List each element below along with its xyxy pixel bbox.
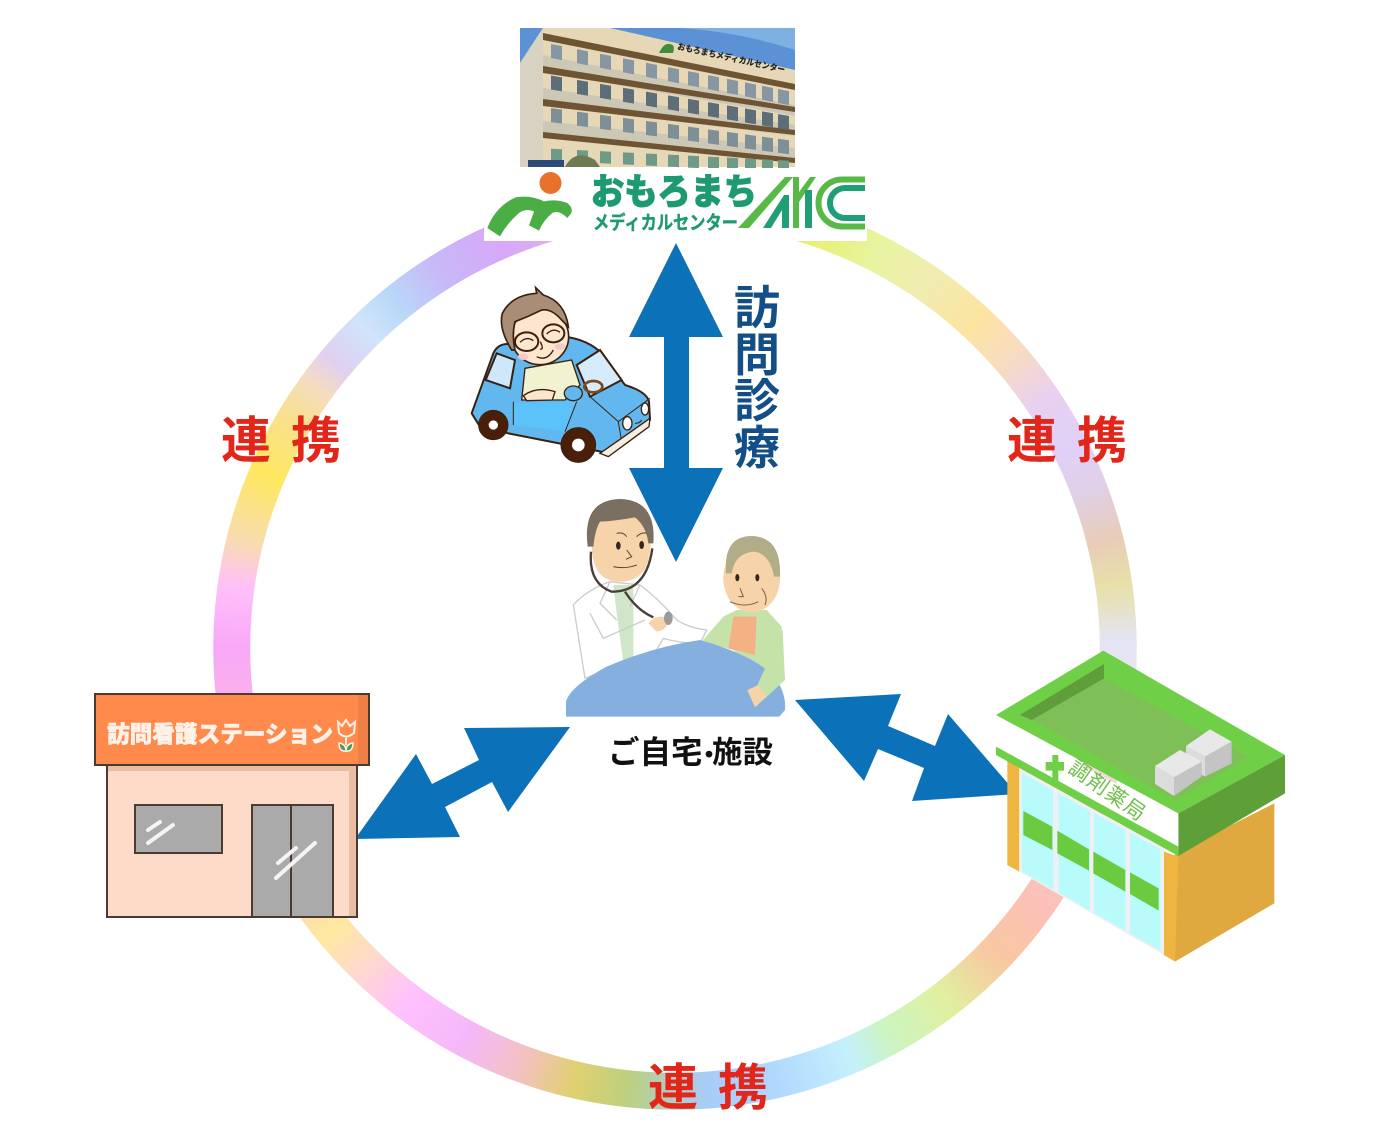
label: cooperation bottom: 連携 — [648, 1060, 788, 1116]
illustration: doctor driving a car — [472, 288, 650, 462]
illustration: doctor examining patient — [566, 499, 785, 717]
label: cooperation left: 連携 — [221, 413, 361, 469]
pharmacy glass front — [1019, 768, 1164, 955]
station door — [252, 805, 333, 917]
label: home or facility: 施設 — [712, 736, 773, 770]
pharmacy roof — [996, 651, 1285, 856]
car wheels — [479, 410, 508, 440]
building: dispensing pharmacy — [996, 651, 1285, 962]
pharmacy walls — [1175, 803, 1274, 962]
vertical label: home-visit care: 訪 — [734, 282, 780, 334]
vertical label: home-visit care: 療 — [734, 422, 780, 474]
label: cooperation right: 連携 — [1007, 413, 1147, 469]
station sign: 訪問看護ステーション — [107, 721, 333, 747]
vertical label: home-visit care: 問 — [734, 329, 780, 381]
vertical label: home-visit care — [734, 282, 780, 474]
logo wordmark: おもろまち — [591, 171, 757, 212]
label: home or facility: ・ — [697, 742, 721, 769]
arrow: nursing station to home — [355, 727, 570, 839]
label: home or facility — [608, 734, 773, 770]
icon: pharmacy cross — [1046, 755, 1064, 783]
steering wheel — [584, 381, 602, 392]
driver — [522, 360, 580, 400]
rainbow cooperation ring — [213, 186, 1137, 1110]
car eyes — [623, 417, 632, 430]
arrow: home to pharmacy — [795, 694, 1017, 801]
patient — [702, 536, 785, 680]
car body — [472, 337, 650, 453]
label: home or facility: ご自宅 — [608, 734, 703, 770]
doctor — [573, 499, 707, 678]
blanket — [566, 640, 785, 717]
photo: hospital building: おもろまちメディカルセンター — [677, 41, 786, 75]
photo: hospital building — [520, 28, 795, 173]
arrow: hospital to home vertical double arrow — [629, 243, 723, 562]
patient arm and hand — [747, 630, 785, 707]
logo: Omoromachi Medical Center — [484, 168, 867, 241]
station window — [135, 805, 222, 853]
roof equipment boxes — [1155, 729, 1232, 796]
pharmacy sign text: 調剤薬局 — [1064, 756, 1149, 826]
building: visiting nurse station — [95, 694, 369, 917]
station body — [107, 765, 357, 917]
logo: Omoromachi Medical Center: メディカルセンター — [593, 211, 738, 234]
logo mark: orange circle and green swoosh — [487, 172, 572, 236]
station sign — [95, 694, 369, 765]
vertical label: home-visit care: 診 — [734, 375, 780, 427]
logo MC letters — [738, 177, 865, 228]
icon: tulip — [338, 720, 355, 751]
